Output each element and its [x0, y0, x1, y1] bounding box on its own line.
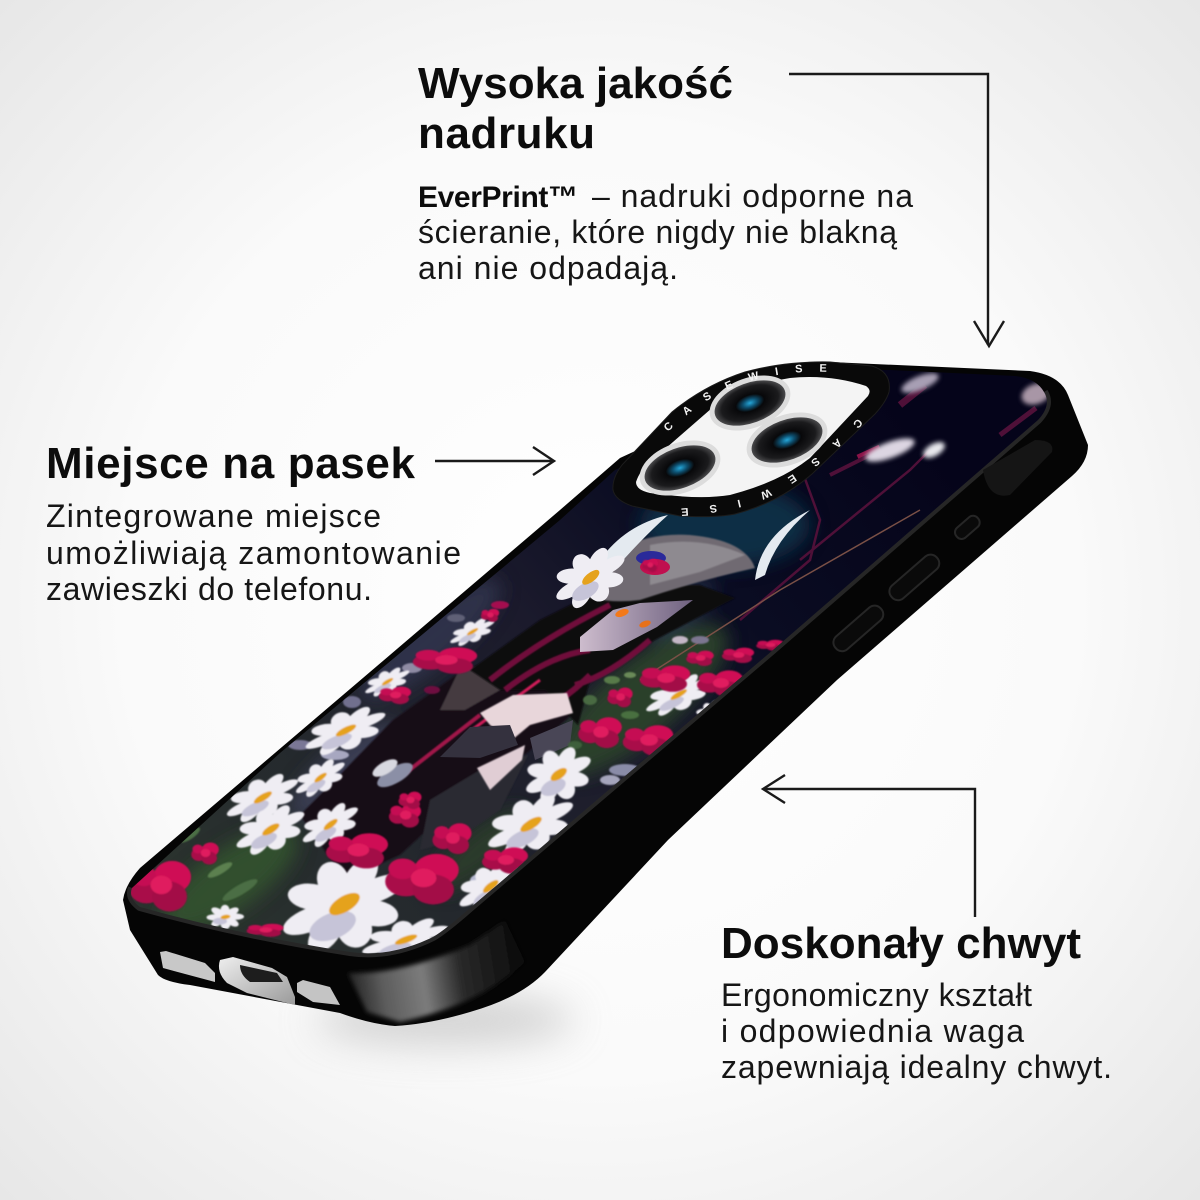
ring lettering: C A S E W I S E: [664, 364, 826, 430]
callout: grip: [721, 919, 1112, 1085]
heading: print quality: Wysoka jakość: [418, 59, 733, 108]
figure: chest and hand: [480, 693, 573, 740]
phone shadow: [315, 994, 575, 1046]
arrow: grip: [763, 775, 975, 917]
veil and headdress: [565, 535, 755, 601]
text: strap slot: Zintegrowane miejsce: [46, 498, 381, 534]
figure: face: [580, 600, 693, 652]
foliage: [147, 483, 810, 950]
text: grip: i odpowiednia waga: [721, 1013, 1024, 1049]
text: grip: Ergonomiczny kształt: [721, 977, 1032, 1013]
figure: red hair strands: [403, 605, 650, 775]
heading: print quality: nadruku: [418, 109, 595, 158]
lenses: [632, 365, 835, 506]
ring lettering: [664, 364, 862, 516]
callout: print quality: [418, 59, 913, 286]
heading: print quality: [418, 59, 733, 158]
text: grip: zapewniają idealny chwyt.: [721, 1049, 1112, 1085]
arrow: strap slot: [435, 447, 554, 475]
text: strap slot: umożliwiają zamontowanie: [46, 535, 461, 571]
camera module: [636, 377, 870, 497]
text: print quality: ścieranie, które nigdy nie blakną: [418, 214, 897, 250]
wispy top flowers: [863, 369, 1054, 466]
side buttons: [830, 440, 1052, 654]
phone case: [123, 361, 1088, 1026]
text: print quality: ani nie odpadają.: [418, 250, 678, 286]
printed artwork: [131, 370, 1047, 954]
white flowers: [206, 612, 730, 971]
ring lettering: C A S E W I S E: [681, 420, 862, 516]
branches: [640, 385, 1036, 680]
heading: grip: Doskonały chwyt: [721, 919, 1081, 968]
bottom ports: [160, 951, 340, 1005]
text: print quality: – nadruki odporne na: [592, 178, 913, 214]
figure: dress and legs: [300, 660, 575, 880]
text: grip: [721, 977, 1112, 1085]
text: print quality: EverPrint™: [418, 181, 578, 214]
case body: [123, 362, 1088, 1026]
figure: hair: [470, 585, 735, 725]
texture spots: [178, 601, 709, 904]
text: strap slot: [46, 498, 461, 607]
feathers: [606, 515, 668, 572]
text: print quality: [418, 178, 913, 286]
headdress flowers: [556, 548, 670, 608]
red roses: [129, 559, 784, 937]
camera ring: [613, 362, 889, 517]
heading: strap slot: Miejsce na pasek: [46, 439, 416, 488]
case inner rim: [131, 392, 1047, 953]
case side gloss: [348, 920, 525, 1022]
callout: strap slot: [46, 439, 461, 607]
text: strap slot: zawieszki do telefonu.: [46, 571, 372, 607]
arrow: print quality: [789, 74, 1004, 346]
